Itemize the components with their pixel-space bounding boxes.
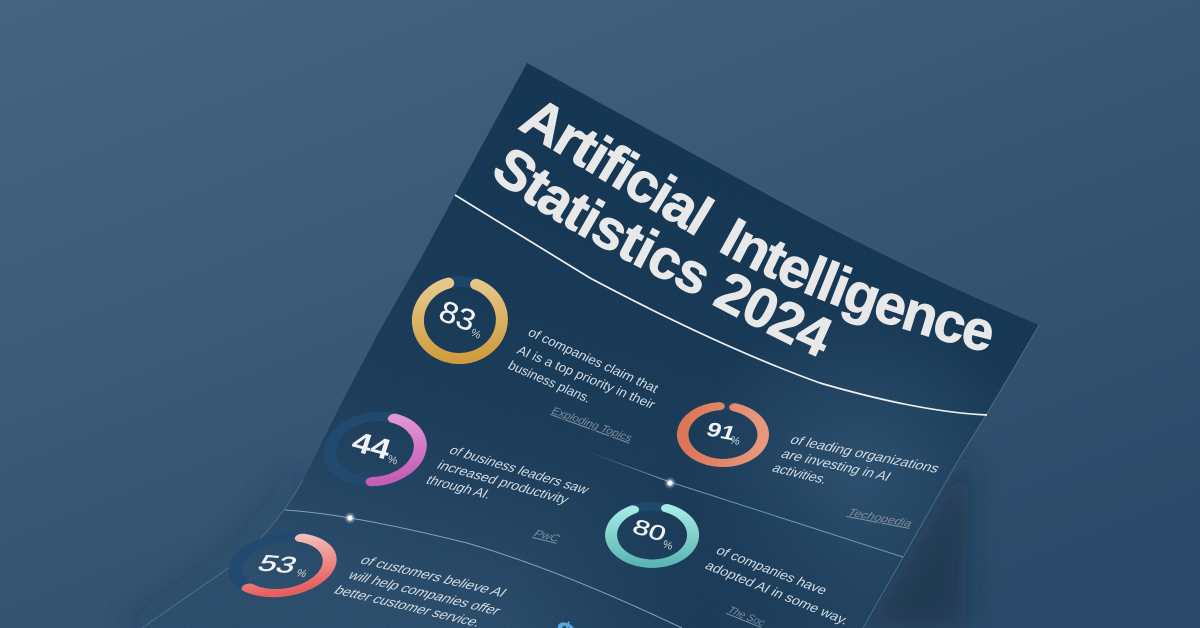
stat: 44 percent	[325, 411, 593, 545]
ring 91	[683, 406, 763, 463]
paper shadow	[130, 450, 970, 628]
paper edge highlight	[142, 325, 1039, 628]
text 44	[423, 443, 593, 507]
ring 80	[611, 506, 693, 564]
stat: 53 percent	[231, 530, 511, 628]
number 53: 53	[253, 551, 301, 579]
ring 44	[325, 411, 425, 487]
number 80: %	[661, 538, 674, 553]
paper sheet	[164, 63, 1039, 628]
number 91: 91	[703, 418, 739, 445]
section divider right	[583, 450, 903, 557]
number 44: %	[386, 453, 399, 468]
stat: 80 percent	[611, 506, 852, 628]
text 91: are investing in AI	[778, 447, 894, 484]
text 83: business plans.	[505, 358, 594, 406]
text 80: of companies have	[713, 543, 830, 597]
text 53: will help companies offer	[344, 567, 505, 618]
source: Techopedia: Techopedia	[846, 507, 914, 530]
stat: 91 percent	[683, 406, 943, 530]
number 80: 80	[629, 515, 669, 546]
text 83	[505, 325, 662, 412]
text 44: increased productivity	[434, 458, 573, 507]
title divider	[455, 195, 987, 415]
title: Statistics 2024	[494, 150, 832, 357]
number 83: %	[469, 327, 483, 342]
number 44: 44	[348, 425, 395, 466]
title: Intelligence	[720, 218, 992, 350]
text 53: of customers believe AI	[357, 553, 511, 599]
text 91: activities.	[769, 461, 831, 487]
title	[494, 102, 992, 357]
ring 83	[415, 279, 505, 361]
text 80: adopted AI in some way.	[702, 558, 852, 627]
stat: 83 percent	[415, 279, 662, 445]
number 53: %	[294, 568, 309, 580]
text 83: of companies claim that	[525, 325, 662, 396]
section divider left	[285, 510, 682, 628]
text 91: of leading organizations	[787, 433, 943, 476]
text 44: of business leaders saw	[446, 443, 593, 497]
text 91	[769, 433, 943, 487]
source: PwC: PwC	[532, 528, 562, 545]
number 83: 83	[435, 294, 480, 338]
text 83: AI is a top priority in their	[514, 343, 659, 412]
text 53	[331, 553, 511, 628]
ring 53	[231, 530, 334, 600]
title: Artificial	[518, 102, 716, 236]
text 53: better customer service.	[331, 583, 486, 628]
source: Exploding Topics: Exploding Topics	[550, 405, 635, 445]
text 44: through AI.	[423, 473, 495, 502]
number 91: %	[728, 435, 742, 448]
